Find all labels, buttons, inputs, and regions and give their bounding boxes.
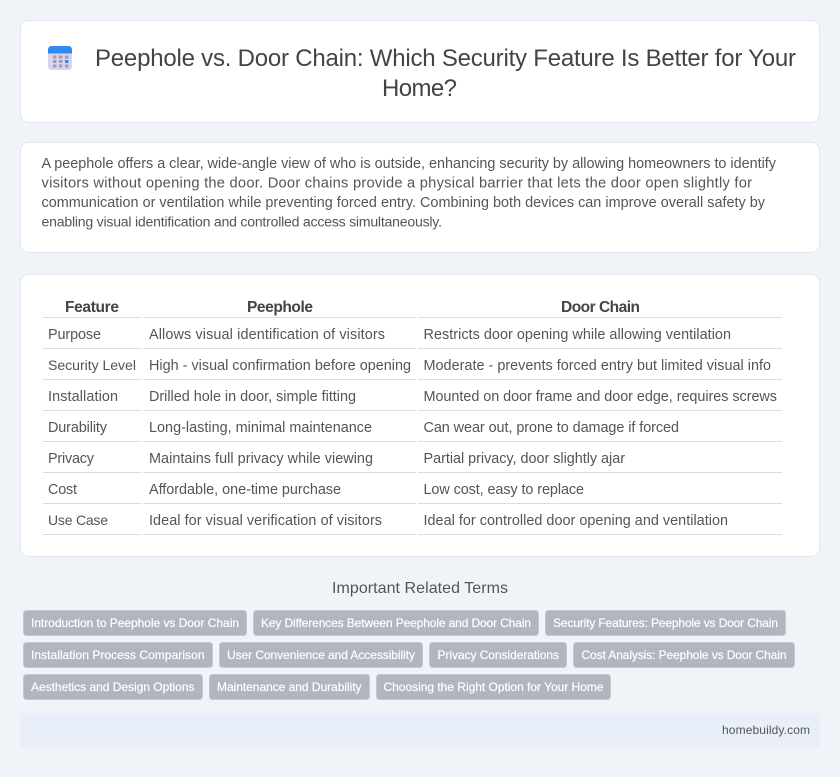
tag <box>24 610 246 636</box>
row: cost <box>43 482 782 504</box>
title text <box>95 45 796 102</box>
intro paragraph: communication or ventilation while preventing forced entry. Combining both devices can improve overall safety by <box>42 195 766 211</box>
row: durability: Can wear out, prone to damage if forced <box>424 420 679 436</box>
footer source text: homebuildy.com <box>722 723 810 737</box>
row: security level: Moderate - prevents forced entry but limited visual info <box>424 358 771 374</box>
icon: calendar <box>48 46 72 70</box>
tag: Key Differences Between Peephole and Door Chain <box>261 616 531 630</box>
intro paragraph: visitors without opening the door. Door chains provide a physical barrier that lets the door open slightly for <box>42 176 752 192</box>
row: use case <box>43 512 782 534</box>
table header: Peephole <box>247 299 313 316</box>
panel: introduction <box>20 142 820 252</box>
row: installation <box>43 389 782 410</box>
tag: Installation Process Comparison <box>31 648 204 662</box>
row: security level: Security Level <box>48 357 136 373</box>
panel: title <box>20 20 820 122</box>
row: purpose: Purpose <box>48 327 101 343</box>
intro paragraph: enabling visual identification and controlled access simultaneously. <box>42 214 442 230</box>
row: privacy: Partial privacy, door slightly ajar <box>424 451 625 467</box>
tag: Aesthetics and Design Options <box>31 680 194 694</box>
tag: Maintenance and Durability <box>217 680 362 694</box>
tag: Security Features: Peephole vs Door Chain <box>553 616 778 630</box>
tag <box>574 642 794 668</box>
row: cost: Cost <box>48 482 77 498</box>
panel: comparison table <box>20 274 820 556</box>
table header <box>43 299 782 318</box>
tag <box>546 610 786 636</box>
intro paragraph <box>42 156 777 230</box>
row: durability <box>43 420 782 442</box>
tag <box>24 642 212 668</box>
row: cost: Low cost, easy to replace <box>424 482 584 498</box>
tag: Cost Analysis: Peephole vs Door Chain <box>582 648 786 662</box>
tag: Choosing the Right Option for Your Home <box>384 680 604 694</box>
row: privacy: Privacy <box>48 451 95 467</box>
table header: Door Chain <box>561 299 640 316</box>
tag <box>210 674 370 700</box>
row: installation: Mounted on door frame and door edge, requires screws <box>424 389 777 405</box>
related terms tags <box>24 610 794 700</box>
row: privacy: Maintains full privacy while viewing <box>149 451 373 467</box>
row: use case: Ideal for controlled door opening and ventilation <box>424 513 728 529</box>
row: use case: Use Case <box>48 512 108 528</box>
row: cost: Affordable, one-time purchase <box>149 482 341 498</box>
tag: Introduction to Peephole vs Door Chain <box>31 616 239 630</box>
row: durability: Durability <box>48 420 108 436</box>
tag: User Convenience and Accessibility <box>227 648 415 662</box>
title text: Home? <box>382 75 457 102</box>
tag <box>220 642 422 668</box>
tag <box>254 610 538 636</box>
intro paragraph: A peephole offers a clear, wide-angle view of who is outside, enhancing security by allowing homeowners to identify <box>42 156 777 172</box>
tag <box>376 674 610 700</box>
row: use case: Ideal for visual verification of visitors <box>149 513 382 529</box>
row: security level: High - visual confirmation before opening <box>149 358 411 374</box>
tag <box>24 674 202 700</box>
footer <box>20 713 820 747</box>
row: purpose: Restricts door opening while allowing ventilation <box>424 327 731 343</box>
row: installation: Drilled hole in door, simple fitting <box>149 389 356 405</box>
row: purpose: Allows visual identification of visitors <box>149 327 385 343</box>
row: durability: Long-lasting, minimal maintenance <box>149 420 372 436</box>
row: privacy <box>43 451 782 472</box>
title text: Peephole vs. Door Chain: Which Security Feature Is Better for Your <box>95 45 796 72</box>
tag <box>430 642 566 668</box>
row: security level <box>43 357 782 380</box>
tag: Privacy Considerations <box>438 648 559 662</box>
row: installation: Installation <box>48 389 118 405</box>
row: purpose <box>43 327 782 348</box>
table header: Feature <box>65 299 119 316</box>
heading: important related terms: Important Related Terms <box>332 580 508 597</box>
